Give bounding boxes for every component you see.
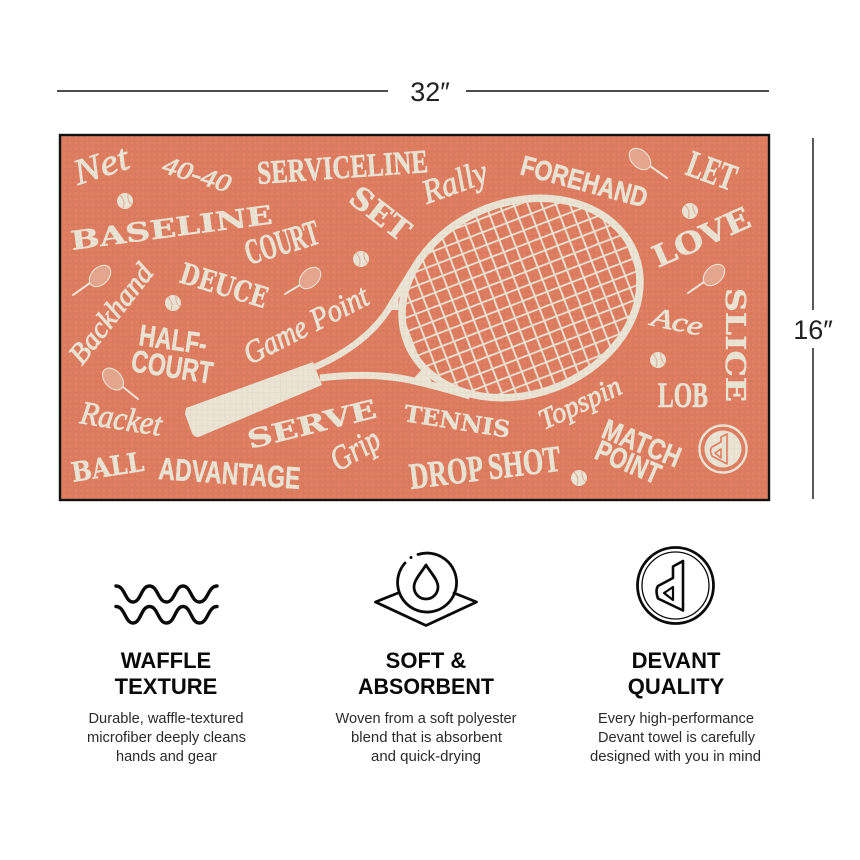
heading: soft and absorbent: ABSORBENT [358,674,495,699]
icon: tennis ball 5 [650,352,666,368]
icon: waffle waves [116,586,217,623]
icon: mini racket 5 [98,364,138,399]
icon: mini racket 1 [73,261,115,295]
word: ADVANTAGE: ADVANTAGE [158,451,302,496]
icon: towel logo [700,426,746,472]
heading: devant quality: QUALITY [628,674,725,699]
text: devant description: Every high-performance [598,711,754,727]
word: BASELINE: BASELINE [69,201,274,257]
word: Net: Net [67,137,135,193]
heading: soft and absorbent: SOFT & [386,648,466,673]
word: LOB: LOB [658,375,708,415]
text: absorbent description: and quick-drying [371,749,481,765]
heading: devant quality: DEVANT [632,648,721,673]
word: SERVICELINE: SERVICELINE [256,144,429,192]
icon: water drop on towel [376,553,476,626]
icon: devant logo [638,548,714,624]
text: waffle description: Durable, waffle-textured [88,711,244,727]
word: Grip: Grip [324,421,387,479]
word: FOREHAND: FOREHAND [517,150,651,213]
word: LOVE: LOVE [647,201,756,275]
height dimension: 16 inches: 16″ [793,315,833,345]
panel: towel [60,135,769,500]
icon: tennis ball 3 [353,251,369,267]
word: LET: LET [681,143,742,200]
icon: tennis ball 6 [571,470,587,486]
icon: tennis ball 2 [165,295,181,311]
icon: mini racket 3 [625,144,667,178]
panel: waffle texture feature [87,586,246,765]
text: absorbent description: Woven from a soft polyester [336,711,517,727]
text: waffle description: hands and gear [116,749,217,765]
word: DROP SHOT: DROP SHOT [407,439,563,498]
word: SERVE: SERVE [244,395,380,456]
icon: large tennis racket [185,165,669,437]
word: Topspin: Topspin [533,370,627,436]
word: POINT: POINT [590,435,666,491]
word: COURT: COURT [240,212,324,273]
word: SET: SET [342,180,418,250]
word: TENNIS: TENNIS [402,400,512,444]
word: COURT second line: COURT [129,343,215,391]
width dimension: 32 inches: 32″ [410,77,450,107]
word: Ace: Ace [646,301,706,342]
word: Racket: Racket [77,395,165,444]
heading: waffle texture: WAFFLE [121,648,211,673]
text: devant description: Devant towel is carefully [598,730,756,746]
word: Backhand: Backhand [62,257,160,370]
icon: mini racket 2 [285,263,325,294]
panel: devant quality feature [590,548,761,765]
word: Rally: Rally [416,154,493,212]
text: devant description: designed with you in mind [590,749,761,765]
word: DEUCE: DEUCE [176,256,272,315]
word: BALL: BALL [69,447,146,489]
word: 40-40: 40-40 [159,152,235,198]
panel: soft and absorbent feature [336,553,517,765]
word: Game Point: Game Point [237,277,375,371]
word: SLICE: SLICE [719,288,750,402]
text: waffle description: microfiber deeply cleans [87,730,246,746]
text: absorbent description: blend that is absorbent [351,730,502,746]
icon: tennis ball 1 [117,193,133,209]
word: MATCH: MATCH [597,414,685,474]
heading: waffle texture: TEXTURE [115,674,217,699]
icon: tennis ball 4 [682,203,698,219]
icon: mini racket 4 [688,260,729,293]
word: HALF-: HALF- [137,319,209,361]
